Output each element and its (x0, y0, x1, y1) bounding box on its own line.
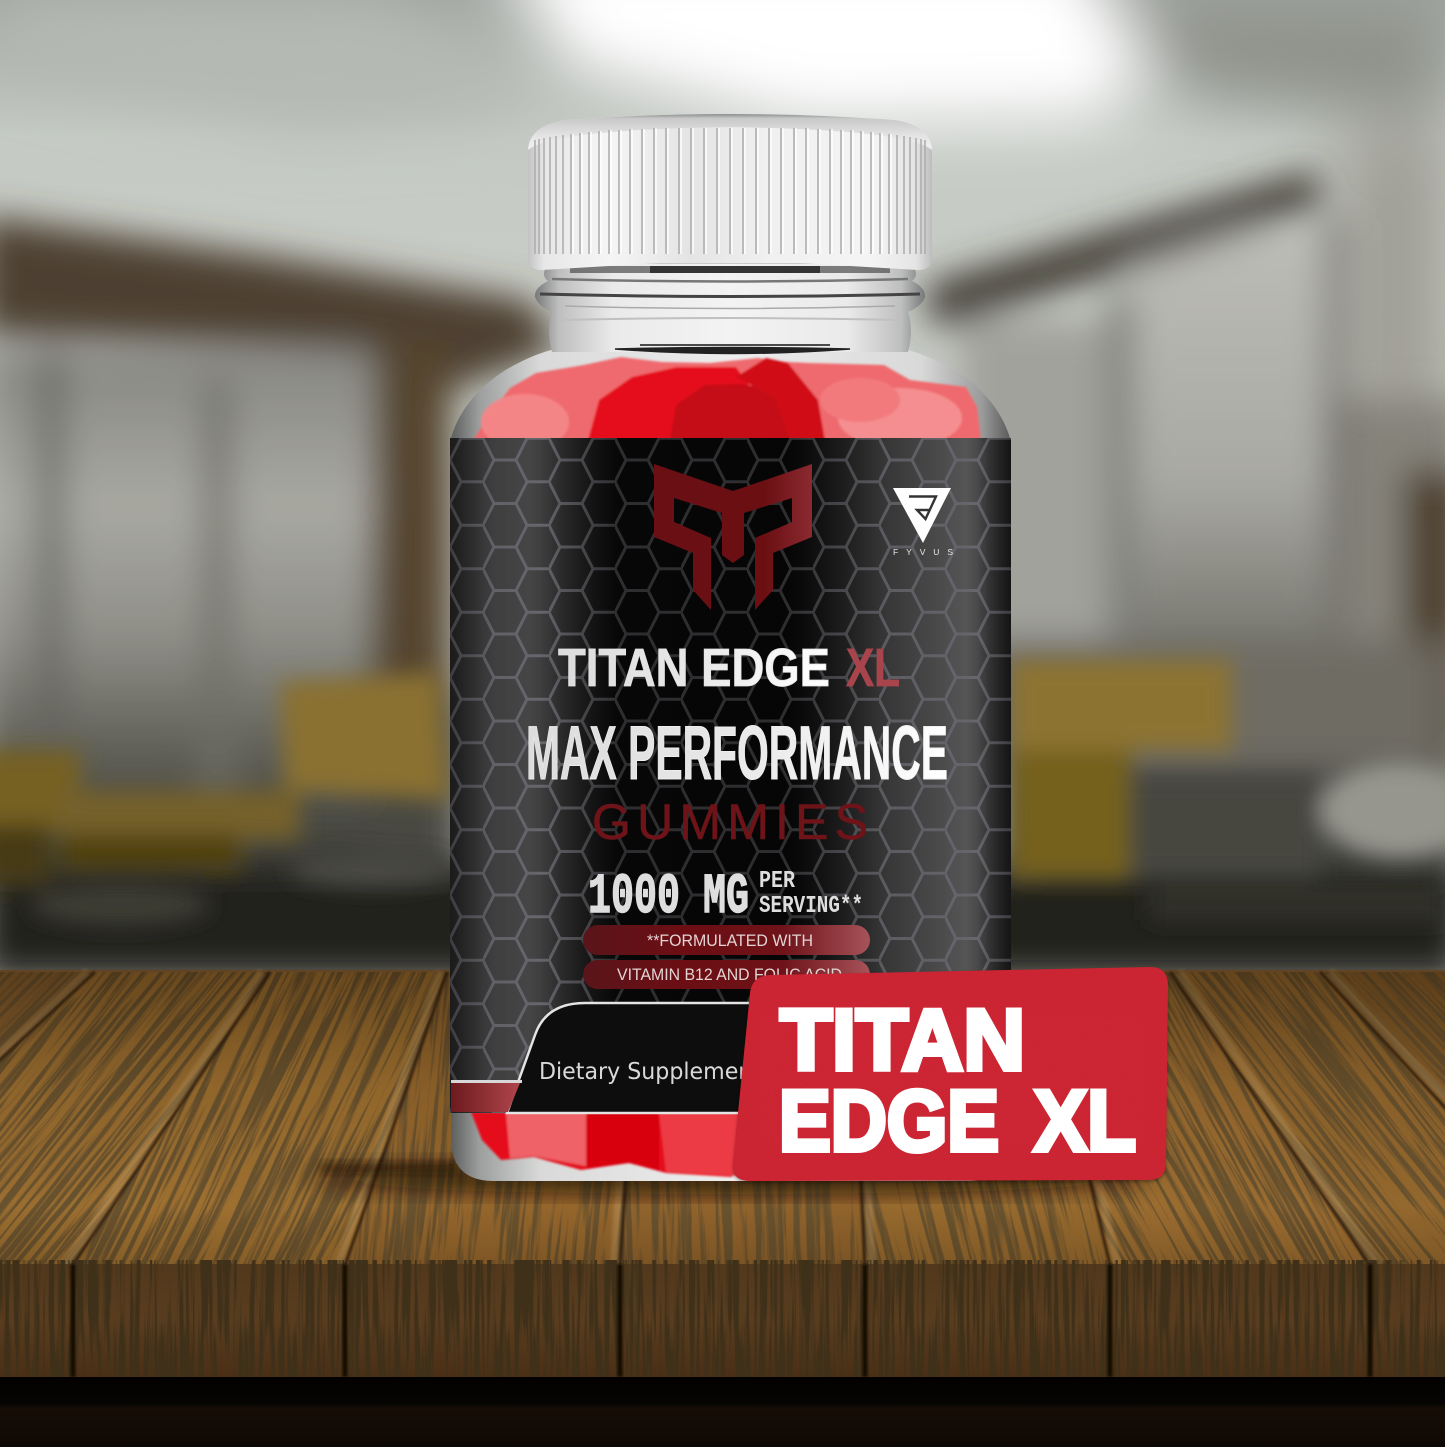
bottle (450, 114, 1011, 1181)
gummies in top of jar (473, 357, 981, 450)
black bottom panel (507, 1003, 1000, 1113)
red product name card (730, 960, 1175, 1185)
product name on label: XL (846, 638, 900, 698)
main logo (654, 464, 812, 610)
gummies in bottom of jar (471, 1112, 740, 1177)
label background (450, 438, 1011, 1113)
card title line 2: XL (1034, 1074, 1136, 1170)
dosage: PER (759, 868, 795, 895)
cap ribs (535, 128, 925, 254)
table underside shadow (0, 1377, 1445, 1447)
white ribbed cap (528, 114, 932, 270)
pill: formulated with: **FORMULATED WITH (647, 931, 813, 950)
pill: vitamin b12 and folic acid (583, 960, 870, 989)
card title line 2 (779, 1074, 1136, 1170)
pill: vitamin b12 and folic acid: VITAMIN B12 AND FOLIC ACID (617, 965, 842, 984)
honeycomb pattern (450, 438, 1011, 1113)
red band (451, 1080, 522, 1112)
wooden table front edge (0, 1264, 1445, 1377)
brand logo: Fyvus: FYVUS (893, 547, 953, 557)
glass neck (535, 264, 925, 354)
dosage: SERVING** (759, 893, 863, 920)
dietary supplement text: Dietary Supplement (539, 1057, 761, 1085)
wooden table top (0, 970, 1445, 1266)
bottle shadow on table (310, 1162, 1150, 1194)
dosage: 1000 MG (588, 866, 749, 930)
brand logo: Fyvus (893, 488, 953, 557)
product name on label: TITAN EDGE (558, 638, 830, 698)
glass body (451, 350, 1010, 1181)
gummies heading: GUMMIES (592, 794, 868, 850)
pill: formulated with (583, 925, 870, 955)
label shading (450, 438, 1011, 1113)
blurred room background (0, 0, 1445, 980)
card title line 2: EDGE (779, 1074, 999, 1170)
max performance heading: MAX PERFORMANCE (526, 711, 948, 796)
card title line 1: TITAN (780, 992, 1025, 1088)
